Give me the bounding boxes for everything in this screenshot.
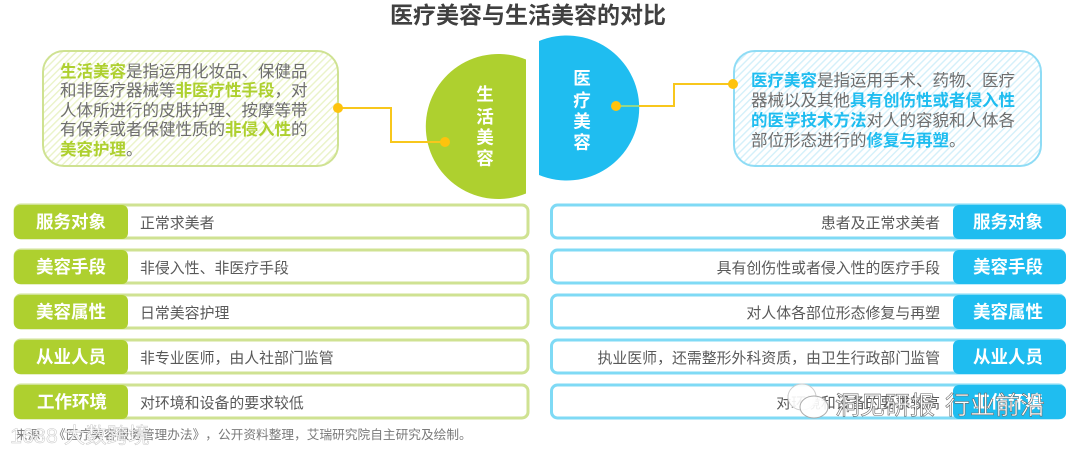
row: medical service target: 患者及正常求美者 <box>821 215 940 232</box>
label: lifestyle beauty: 美 <box>476 128 494 148</box>
row: lifestyle service target: 服务对象 <box>36 212 106 232</box>
row: medical work environment: 对环境和设备的要求较高 <box>776 394 940 412</box>
watermark: bottom right: 行业前沿 <box>945 392 1045 420</box>
row: lifestyle service target <box>14 205 528 239</box>
row: lifestyle beauty attribute <box>14 295 528 329</box>
label: lifestyle beauty: 活 <box>476 107 494 127</box>
watermark: bottom left: 1688 大数跨境 <box>10 424 150 448</box>
panel: lifestyle beauty definition <box>43 51 338 166</box>
row: medical work environment: 工作环境 <box>973 392 1043 412</box>
row: lifestyle work environment <box>14 385 528 419</box>
watermark: bottom right <box>788 384 1045 420</box>
row: medical practitioners: 执业医师，还需整形外科资质，由卫生行政部门监管 <box>598 350 940 367</box>
connector: lifestyle card to half circle <box>333 103 450 147</box>
row: medical service target: 服务对象 <box>973 212 1043 232</box>
row: medical service target <box>552 205 1066 239</box>
row: lifestyle beauty method: 非侵入性、非医疗手段 <box>140 260 289 277</box>
icon: medical beauty half circle <box>539 36 639 180</box>
text: lifestyle beauty definition: 生活美容是指运用化妆品、保健品 <box>60 63 308 81</box>
label: medical beauty: 美 <box>573 112 591 132</box>
label: lifestyle beauty: 生 <box>476 84 494 104</box>
row: medical practitioners: 从业人员 <box>973 347 1043 367</box>
row: medical practitioners <box>552 340 1066 374</box>
text: medical beauty definition: 的医学技术方法对人的容貌和人体各 <box>751 112 1015 130</box>
title: 医疗美容与生活美容的对比 <box>390 2 666 28</box>
row: lifestyle practitioners <box>14 340 528 374</box>
row: medical beauty attribute: 对人体各部位形态修复与再塑 <box>746 304 940 322</box>
text: lifestyle beauty definition: 和非医疗器械等非医疗性手段，对 <box>60 82 308 100</box>
row: medical work environment <box>552 385 1066 419</box>
row: lifestyle beauty method <box>14 250 528 284</box>
row: lifestyle practitioners: 从业人员 <box>36 347 106 367</box>
watermark: bottom right: 洞见研报 <box>835 392 935 420</box>
row: lifestyle beauty attribute: 日常美容护理 <box>140 305 229 322</box>
row: medical beauty method: 具有创伤性或者侵入性的医疗手段 <box>717 260 940 277</box>
text: lifestyle beauty definition: 人体所进行的皮肤护理、按摩等带 <box>60 101 308 120</box>
row: lifestyle practitioners: 非专业医师，由人社部门监管 <box>140 350 334 367</box>
text: lifestyle beauty definition: 有保养或者保健性质的非侵入性的 <box>60 121 308 139</box>
text: medical beauty definition: 器械以及其他具有创伤性或者侵入性 <box>751 92 1015 110</box>
row: lifestyle work environment: 对环境和设备的要求较低 <box>140 394 304 412</box>
row: medical beauty attribute <box>552 295 1066 329</box>
label: medical beauty: 医 <box>573 68 591 88</box>
source note: 来源：《医疗美容服务管理办法》，公开资料整理，艾瑞研究院自主研究及绘制。 <box>15 427 472 442</box>
connector: medical half circle to card <box>611 79 738 111</box>
label: lifestyle beauty: 容 <box>476 148 494 168</box>
row: lifestyle work environment: 工作环境 <box>37 392 107 412</box>
label: medical beauty: 疗 <box>573 90 591 110</box>
row: lifestyle service target: 正常求美者 <box>140 215 215 232</box>
text: lifestyle beauty definition: 美容护理。 <box>60 141 142 159</box>
icon: lifestyle beauty half circle <box>426 54 526 199</box>
row: medical beauty method <box>552 250 1066 284</box>
row: lifestyle beauty method: 美容手段 <box>36 257 106 277</box>
row: lifestyle beauty attribute: 美容属性 <box>36 302 106 322</box>
label: medical beauty: 容 <box>573 132 591 152</box>
text: medical beauty definition: 医疗美容是指运用手术、药物、医疗 <box>751 72 1015 90</box>
row: medical beauty attribute: 美容属性 <box>973 302 1043 322</box>
text: medical beauty definition: 部位形态进行的修复与再塑。 <box>751 132 966 150</box>
panel: medical beauty definition <box>734 51 1041 166</box>
row: medical beauty method: 美容手段 <box>973 257 1043 277</box>
